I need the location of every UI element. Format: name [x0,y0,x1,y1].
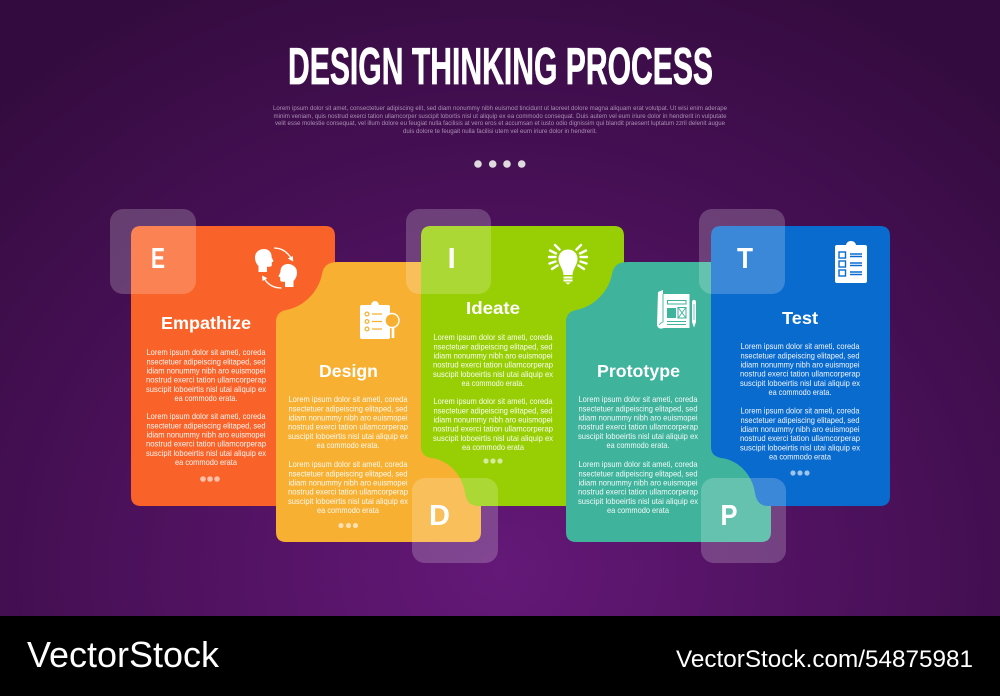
text: ideate: ea commodo erata. [462,379,524,388]
letter badge: E [110,209,196,294]
letter badge: I: I [448,243,456,275]
text: prototype: idiam nonummy nibh aro euismopei [578,478,698,488]
heading: empathize: Empathize [161,313,251,333]
text: prototype: nsectetuer adipeiscing elitaped, sed [578,404,698,413]
text: design: idiam nonummy nibh aro euismopei [288,478,408,488]
letter badge: T: T [737,243,753,275]
text: ideate: nsectetuer adipeiscing elitaped, sed [434,342,553,351]
icon: checklist clipboard [835,241,867,283]
text: empathize: idiam nonummy nibh aro euismopei [146,366,266,376]
text: design: Lorem ipsum dolor sit ameti, coreda [288,395,408,404]
heading: design: Design [319,361,378,381]
text: design: nsectetuer adipeiscing elitaped, sed [288,469,408,478]
text: prototype: idiam nonummy nibh aro euismopei [578,414,698,422]
text: prototype: Lorem ipsum dolor sit ameti, coreda [578,460,698,469]
text: design: nsectetuer adipeiscing elitaped, sed [288,404,408,413]
title: DESIGN THINKING PROCESS [288,38,713,96]
letter badge: I [406,209,491,294]
header dots [474,160,526,168]
icon: blueprint and pencil [657,290,696,329]
text: prototype: nostrud exerci tation ullamcorperap [578,488,698,497]
text: ideate [433,333,553,452]
text: test: nostrud exerci tation ullamcorperap [740,434,860,443]
letter badge: P [701,478,786,563]
icon: clipboard with magnifier [360,301,399,339]
heading: test: Test [782,308,818,328]
letter badge: D: D [429,500,450,532]
text: prototype [578,395,698,515]
text: ideate: nsectetuer adipeiscing elitaped, sed [434,406,553,415]
text: ideate: idiam nonummy nibh aro euismopei [434,416,553,424]
text: test: ea commodo erata. [768,388,832,397]
text: prototype: ea commodo erata. [606,441,670,450]
letter badge: T [699,209,785,294]
intro text: duis dolore te feugait nulla facilisi utem vel eum iriure dolor in hendrerit. [403,128,597,135]
text: test: Lorem ipsum dolor sit ameti, coreda [740,406,860,416]
logo wordmark: VectorStock [27,634,220,675]
text: ideate: ea commodo erata [462,443,524,452]
text: ideate: nostrud exerci tation ullamcorperap [433,361,553,370]
text: design: nostrud exerci tation ullamcorperap [288,423,408,432]
text: empathize: ea commodo erata. [174,394,238,403]
text: empathize: nostrud exerci tation ullamcorperap [146,376,266,385]
text: ideate: idiam nonummy nibh aro euismopei [434,352,553,360]
text: ideate: nostrud exerci tation ullamcorperap [433,425,553,434]
text: empathize: suscipit loboeirtis nisl utai aliquip ex [146,385,266,394]
text: empathize: ea commodo erata [175,458,237,467]
text: ideate: Lorem ipsum dolor sit ameti, coreda [434,397,553,406]
intro text: Lorem ipsum dolor sit amet, consectetuer adipiscing elit, sed diam nonummy nibh euismod tincidunt ut laoreet dolore magna aliquam erat volutpat. Ut wisi enim aderape [273,105,727,112]
text: test: idiam nonummy nibh aro euismopei [740,425,860,434]
letter badge: D [412,478,498,563]
letter badge: E: E [151,243,165,275]
text: test: nsectetuer adipeiscing elitaped, sed [740,416,860,425]
intro text: minim veniam, quis nostrud exerci tation ullamcorper suscipit lobortis nisl ut aliquip ex ea commodo consequat. Duis autem vel eum iriure dolor in hendrerit in vulputate [274,113,727,120]
text: design: ea commodo erata. [316,441,380,450]
icon: two heads with arrows [255,248,297,288]
text: test: suscipit loboeirtis nisl utai aliquip ex [740,444,860,452]
dots: ideate [483,458,503,464]
text: test: idiam nonummy nibh aro euismopei [740,360,860,370]
heading: prototype: Prototype [597,361,680,381]
image id url: VectorStock.com/54875981 [676,646,973,673]
text: empathize: suscipit loboeirtis nisl utai aliquip ex [146,449,266,458]
text: empathize: Lorem ipsum dolor sit ameti, coreda [146,412,266,421]
text: prototype: Lorem ipsum dolor sit ameti, coreda [578,395,698,404]
text: test: Lorem ipsum dolor sit ameti, coreda [740,342,860,351]
icon: light bulb [549,245,587,284]
text: prototype: ea commodo erata [607,506,669,515]
text: prototype: nsectetuer adipeiscing elitaped, sed [578,469,698,478]
panel: empathize [131,226,335,506]
intro text [273,105,727,135]
letter badge: P: P [720,500,738,532]
panel: test [711,226,890,506]
text: empathize: nsectetuer adipeiscing elitaped, sed [146,357,266,366]
text: prototype: suscipit loboeirtis nisl utai aliquip ex [578,497,698,506]
text: test: ea commodo erata [769,452,831,462]
text: design: ea commodo erata [317,506,379,515]
text: test: suscipit loboeirtis nisl utai aliquip ex [740,379,860,388]
text: test: nsectetuer adipeiscing elitaped, sed [740,351,860,360]
panel: prototype [566,262,771,542]
text: ideate: suscipit loboeirtis nisl utai aliquip ex [433,434,553,443]
text: test: nostrud exerci tation ullamcorperap [740,370,860,379]
text: design [288,395,408,515]
text: design: suscipit loboeirtis nisl utai aliquip ex [288,432,408,441]
text: empathize: Lorem ipsum dolor sit ameti, coreda [146,348,266,357]
dots: empathize [200,476,220,482]
text: design: nostrud exerci tation ullamcorperap [288,488,408,497]
text: design: idiam nonummy nibh aro euismopei [288,414,408,422]
intro text: velit esse molestie consequat, vel illum dolore eu feugiat nulla facilisis at vero eros et accumsan et iusto odio dignissim qui blandit praesent luptatum zzril delenit augue [275,120,725,127]
text: prototype: nostrud exerci tation ullamcorperap [578,423,698,432]
text: ideate: suscipit loboeirtis nisl utai aliquip ex [433,370,553,379]
panel: ideate [421,226,624,506]
text: empathize: nsectetuer adipeiscing elitaped, sed [146,421,266,430]
text: empathize [146,348,266,467]
text: design: Lorem ipsum dolor sit ameti, coreda [288,460,408,469]
text: design: suscipit loboeirtis nisl utai aliquip ex [288,497,408,506]
text: prototype: suscipit loboeirtis nisl utai aliquip ex [578,432,698,441]
heading: ideate: Ideate [466,298,520,318]
panel: design [276,262,481,542]
watermark band [0,616,1000,696]
text: ideate: Lorem ipsum dolor sit ameti, coreda [434,333,553,342]
dots: test [790,470,810,476]
text: test [740,342,860,462]
text: empathize: idiam nonummy nibh aro euismopei [146,430,266,440]
dots: design [338,523,358,528]
text: empathize: nostrud exerci tation ullamcorperap [146,440,266,449]
